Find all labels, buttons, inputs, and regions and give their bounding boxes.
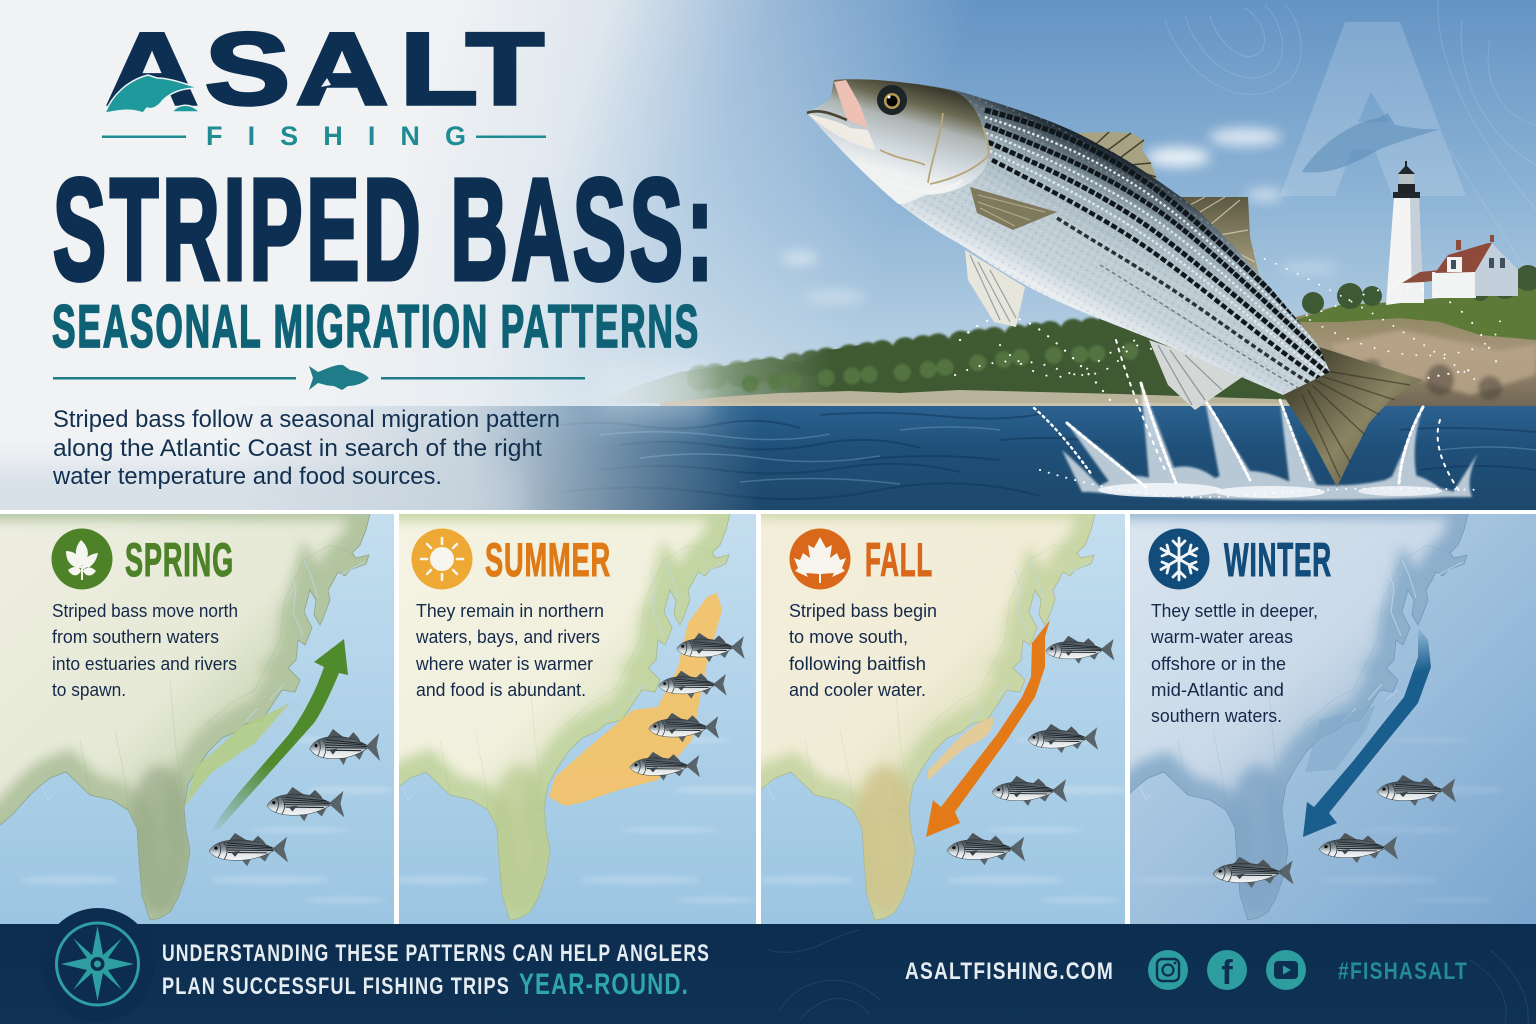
keeper's house (1402, 235, 1518, 303)
logo A notch (321, 78, 331, 87)
spring habitat shading (184, 703, 290, 807)
summer text (415, 600, 604, 700)
winter text: warm-water areas (1150, 626, 1293, 647)
summer text: and food is abundant. (416, 679, 586, 700)
footer message: PLAN SUCCESSFUL FISHING TRIPS (162, 973, 510, 1000)
winter header (1148, 528, 1332, 590)
winter shelf shading (1305, 706, 1375, 772)
spring fish group (209, 729, 380, 866)
spring text: into estuaries and rivers (52, 653, 237, 674)
footer contours (768, 930, 1528, 1024)
cliff green cap (1290, 268, 1536, 340)
tail (1283, 347, 1423, 487)
winter text (1150, 600, 1318, 726)
icon: snowflake (1148, 528, 1210, 590)
icon: facebook: f (1221, 954, 1233, 992)
summer text: waters, bays, and rivers (415, 626, 600, 647)
ventral fin (965, 250, 1025, 327)
heading: spring: SPRING (125, 533, 234, 586)
summer fish group (630, 633, 745, 781)
intro paragraph: water temperature and food sources. (52, 463, 442, 490)
icon: sun (412, 528, 472, 590)
icon: leaf (52, 528, 112, 590)
hero background: sky, sea and coastline (0, 0, 1536, 535)
cliff rocks (1330, 330, 1536, 400)
heading: summer: SUMMER (485, 533, 611, 586)
footer message (162, 940, 710, 1001)
footer bar (0, 924, 1536, 1024)
icon: instagram (1148, 950, 1188, 990)
sea ripples (560, 413, 1536, 499)
heading: fall: FALL (865, 533, 933, 586)
winter text: mid-Atlantic and (1151, 679, 1284, 700)
winter migration arrow (1303, 627, 1431, 837)
fall text (789, 600, 937, 700)
soft dorsal fin (1178, 197, 1262, 287)
intro paragraph (52, 406, 560, 490)
hashtag: #FISHASALT (1338, 958, 1468, 985)
fall fish group (947, 636, 1114, 865)
intro paragraph: along the Atlantic Coast in search of the right (53, 435, 542, 462)
fall text: and cooler water. (789, 679, 926, 700)
icon: youtube (1266, 950, 1306, 990)
panel: summer (399, 514, 756, 924)
panel: fall (761, 514, 1125, 924)
winter text: southern waters. (1151, 705, 1282, 726)
splash behind leaping fish (955, 240, 1500, 500)
summer header (412, 528, 611, 590)
spring text: from southern waters (52, 626, 219, 647)
fall habitat shading (928, 717, 993, 780)
logo fish emblem (105, 75, 200, 113)
spiny dorsal fin (1077, 132, 1161, 187)
heading: winter: WINTER (1224, 533, 1332, 586)
ghost A watermark (1280, 22, 1466, 196)
summer text: They remain in northern (416, 600, 604, 621)
fall text: Striped bass begin (789, 600, 937, 621)
intro paragraph: Striped bass follow a seasonal migration pattern (53, 406, 560, 433)
fall migration arrow (926, 620, 1050, 837)
headland cliff (1285, 268, 1536, 410)
body stripes (904, 82, 1330, 394)
divider with fish icon (53, 365, 585, 390)
panel: spring (0, 500, 395, 924)
winter text: They settle in deeper, (1151, 600, 1318, 621)
summer coastline map (399, 514, 730, 920)
spring text: to spawn. (52, 679, 126, 700)
summer text: where water is warmer (415, 653, 593, 674)
lighthouse (1386, 161, 1423, 305)
winter coastline map (1130, 514, 1468, 920)
fall header (790, 528, 933, 590)
sandy shoreline (660, 390, 1300, 406)
compass badge (41, 908, 155, 1022)
clouds (782, 128, 1340, 302)
icon: facebook (1207, 950, 1247, 992)
gill plates (880, 113, 989, 184)
spring text (52, 600, 238, 700)
spring coastline map (0, 500, 372, 920)
spring text: Striped bass move north (52, 600, 238, 621)
logo: ASALT Fishing (102, 12, 546, 151)
subtitle: SEASONAL MIGRATION PATTERNS (52, 293, 700, 360)
sea (0, 406, 1536, 510)
fish body (807, 80, 1330, 395)
footer message: YEAR-ROUND. (519, 968, 689, 1001)
winter fish group (1213, 775, 1456, 888)
fall text: following baitfish (789, 653, 926, 674)
panel: winter (1130, 514, 1536, 924)
spring header (52, 528, 234, 590)
white separator band (0, 510, 1536, 924)
fish head (807, 79, 988, 204)
fall text: to move south, (789, 626, 908, 647)
summer habitat zone (549, 593, 722, 806)
hilltop trees (1302, 265, 1536, 314)
anal fin (1149, 340, 1248, 410)
spring migration arrow (209, 639, 348, 835)
website: ASALTFISHING.COM (905, 958, 1114, 985)
eye (877, 85, 907, 115)
mouth (834, 80, 868, 128)
logo wordmark: ASALT (106, 12, 544, 126)
footer message: UNDERSTANDING THESE PATTERNS CAN HELP ANGLERS (162, 940, 710, 967)
leaping striped bass (800, 70, 1423, 487)
logo subtitle: FISHING (206, 121, 466, 151)
topographic contours (1165, 0, 1536, 290)
winter text: offshore or in the (1151, 653, 1286, 674)
distant tree line (600, 322, 1300, 403)
pectoral fin (970, 187, 1057, 230)
icon: maple leaf (790, 528, 850, 590)
fall coastline map (761, 514, 1096, 920)
main title: STRIPED BASS: (53, 149, 717, 310)
